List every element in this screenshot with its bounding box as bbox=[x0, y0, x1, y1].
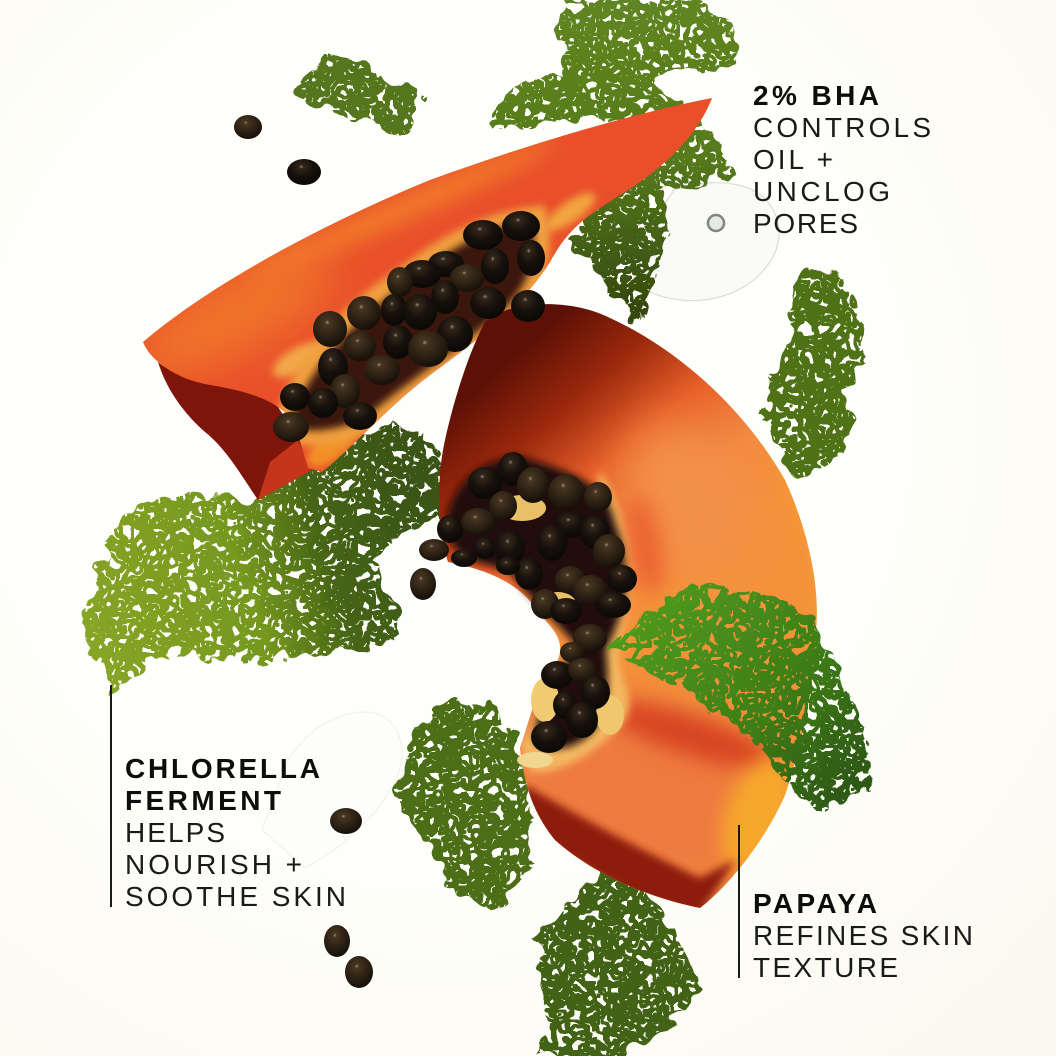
callout: chlorella ferment: CHLORELLA bbox=[125, 753, 320, 784]
seeds: loose bbox=[234, 115, 449, 988]
droplet: lower gel bbox=[262, 712, 402, 868]
callout: chlorella ferment: FERMENT bbox=[125, 785, 281, 816]
callout: 2% BHA bbox=[753, 80, 931, 239]
seaweed: bottom bbox=[535, 868, 700, 1056]
callout: 2% BHA: OIL + bbox=[753, 144, 833, 175]
callout: papaya: REFINES SKIN bbox=[753, 920, 973, 951]
seeds: upper slice bbox=[273, 211, 545, 442]
upper seed cavity bbox=[290, 222, 534, 430]
seaweed: left large bbox=[82, 425, 452, 695]
upper slice flesh bbox=[143, 98, 712, 472]
seeds: lower slice bbox=[437, 452, 637, 753]
leader line: chlorella bbox=[110, 685, 112, 907]
seaweed: top small sprig bbox=[297, 53, 420, 134]
papaya: upper slice bbox=[121, 90, 730, 500]
callout: papaya bbox=[753, 888, 973, 983]
callout: 2% BHA: UNCLOG bbox=[753, 176, 890, 207]
papaya: lower slice bbox=[439, 304, 817, 908]
callout: 2% BHA: 2% BHA bbox=[753, 80, 879, 111]
callout: chlorella ferment: NOURISH + bbox=[125, 849, 302, 880]
seaweed: top right behind fruit bbox=[487, 0, 736, 320]
seaweed: on top of lower slice bbox=[604, 585, 872, 809]
callout: chlorella ferment bbox=[125, 753, 346, 912]
seaweed: lower centre bbox=[397, 700, 533, 907]
callout: papaya: PAPAYA bbox=[753, 888, 877, 919]
lower seed cavity bbox=[445, 456, 626, 749]
droplet: upper gel bbox=[640, 183, 779, 301]
pulp patches bbox=[531, 678, 559, 722]
callout: papaya: TEXTURE bbox=[753, 952, 898, 983]
callout: 2% BHA: CONTROLS bbox=[753, 112, 931, 143]
callout: 2% BHA: PORES bbox=[753, 208, 858, 239]
seaweed: right sprig bbox=[755, 271, 862, 478]
callout: chlorella ferment: HELPS bbox=[125, 817, 225, 848]
callout: chlorella ferment: SOOTHE SKIN bbox=[125, 881, 346, 912]
upper slice underside bbox=[158, 362, 312, 500]
leader line: papaya bbox=[738, 825, 740, 978]
